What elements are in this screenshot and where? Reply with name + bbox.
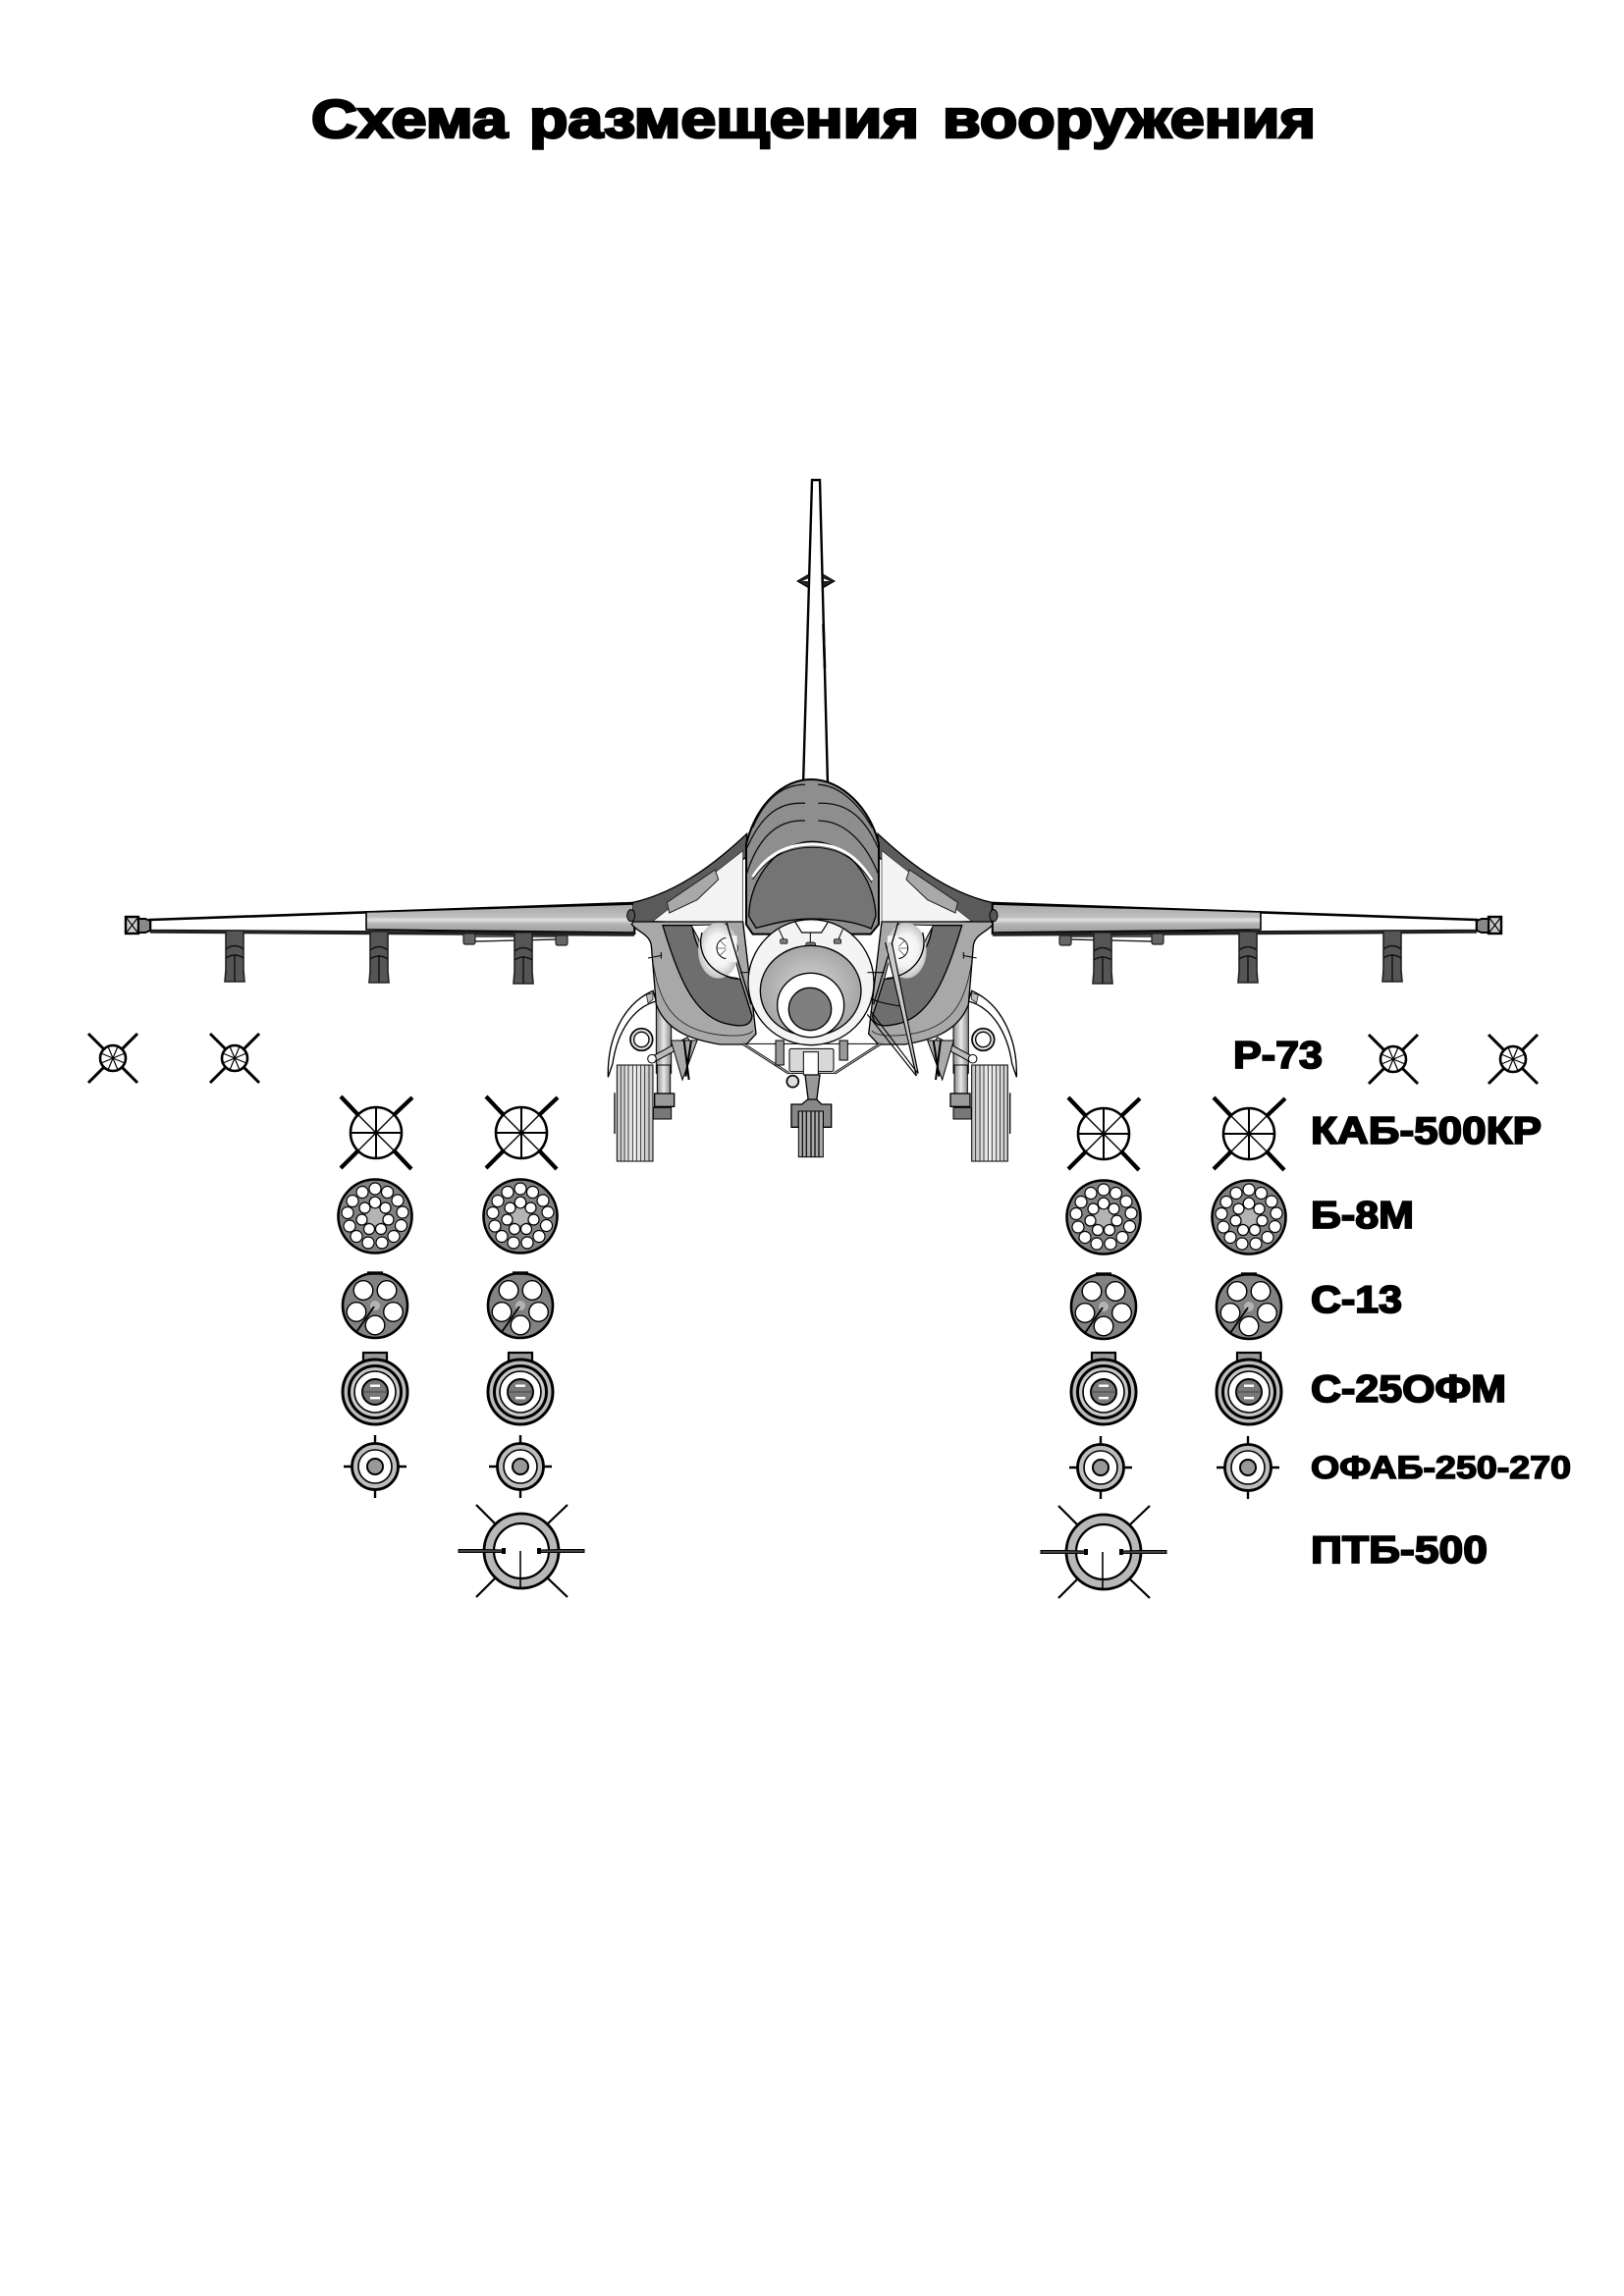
B-8M rocket pods xyxy=(338,1180,1286,1255)
tail fin xyxy=(797,480,835,785)
label: R-73: Р-73 xyxy=(1233,1035,1323,1077)
main landing gear xyxy=(608,990,1016,1161)
label: S-25OFM: С-25ОФМ xyxy=(1311,1368,1506,1411)
title: вооружения xyxy=(943,88,1316,149)
label: S-13: С-13 xyxy=(1311,1279,1402,1321)
label: KAB-500KR: КАБ-500КР xyxy=(1311,1110,1542,1152)
PTB-500 drop tanks xyxy=(459,1505,1166,1598)
S-13 rocket pods xyxy=(343,1273,1281,1339)
air data probe xyxy=(867,942,918,1076)
label: PTB-500: ПТБ-500 xyxy=(1311,1529,1488,1572)
right wing pylons xyxy=(1093,931,1402,984)
intakes and fuselage sides xyxy=(627,833,998,1044)
lower fuselage and nose gear xyxy=(743,1041,881,1157)
aircraft front view xyxy=(126,480,1501,1161)
label: B-8M: Б-8М xyxy=(1311,1195,1414,1237)
nose radome xyxy=(748,920,883,1045)
OFAB-250-270 bombs xyxy=(344,1435,1279,1499)
label: OFAB-250-270: ОФАБ-250-270 xyxy=(1311,1450,1571,1485)
fuselage and landing gear xyxy=(608,779,1016,1161)
R-73 missiles right xyxy=(1369,1035,1538,1084)
right wing xyxy=(993,903,1501,945)
title: Схема xyxy=(311,88,508,149)
KAB-500KR bombs xyxy=(341,1096,1285,1170)
S-25OFM rockets xyxy=(343,1353,1281,1424)
left wing pylons xyxy=(225,931,533,984)
R-73 missiles left xyxy=(88,1034,259,1083)
title: размещения xyxy=(529,88,919,149)
left wing xyxy=(126,903,634,945)
canopy xyxy=(746,779,879,934)
